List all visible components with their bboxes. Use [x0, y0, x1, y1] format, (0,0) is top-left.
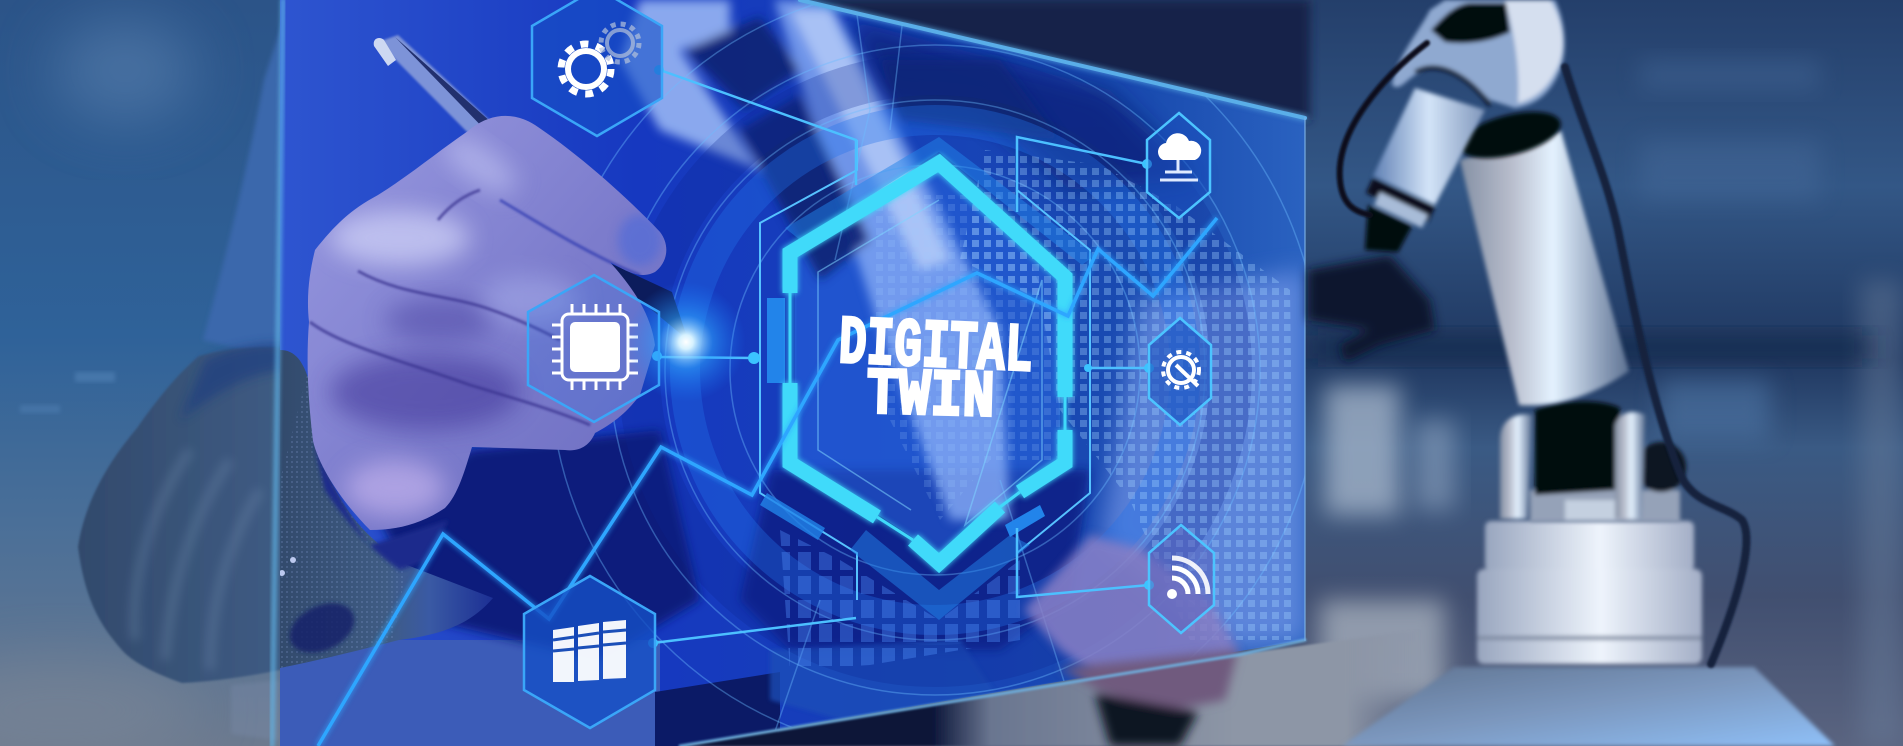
robot cables	[1340, 43, 1746, 664]
hexagon: cloud icon	[1147, 113, 1210, 218]
shirt and tie light bands	[620, 0, 1060, 520]
pen tip light spark	[626, 282, 746, 402]
hexagon interior blue wash	[795, 170, 1060, 555]
navy upper right suit	[850, 20, 1200, 190]
dark navy suit beneath hand	[380, 430, 700, 660]
lower centre lighter band	[768, 640, 980, 718]
lower centre dark suit	[740, 470, 1090, 650]
robot elbow joint	[1392, 0, 1565, 108]
pen	[374, 35, 688, 340]
data columns below hexagon	[780, 530, 1020, 670]
sleeve inside panel	[280, 350, 493, 668]
transparent holographic panel	[231, 0, 1305, 746]
robot arm	[1308, 0, 1835, 746]
title: Digital Twin	[837, 306, 1034, 436]
robot gripper shadow	[1308, 255, 1435, 362]
hand and cuff below panel	[1060, 650, 1238, 746]
connector dots	[648, 65, 1154, 648]
hexagon: wifi icon	[1149, 525, 1214, 633]
robot main arm cylinder	[1460, 131, 1629, 405]
hexagon: tools gear icon	[1149, 318, 1211, 425]
robot pedestal	[1342, 667, 1835, 746]
hexagon: chip icon	[528, 275, 659, 422]
floor below panel	[680, 630, 1420, 746]
world map dot grid	[960, 150, 1295, 640]
title: Digital Twin: DIGITAL	[837, 306, 1034, 391]
accent bars around hexagon	[760, 137, 1095, 620]
robot base rings	[1477, 521, 1702, 664]
second hand behind panel	[1024, 535, 1238, 700]
dotted cuff weave	[281, 376, 403, 668]
jacket sleeve	[78, 343, 493, 683]
connector lines	[653, 70, 1149, 643]
inner thin hexagon	[818, 200, 1042, 525]
outer thin hexagon frame	[760, 137, 1090, 600]
main cyan hexagon	[790, 163, 1065, 563]
dark torso above panel	[780, 0, 1310, 120]
sleeve buttons	[280, 557, 357, 655]
scene inside panel	[253, 0, 1320, 746]
robot black joint ring	[1455, 103, 1565, 167]
concentric hologram rings	[550, 0, 1320, 746]
dots inside hexagon	[870, 195, 1060, 520]
robot shoulder fork	[1500, 401, 1686, 522]
right side lavender glow	[1100, 270, 1305, 650]
hexagon: server racks icon	[524, 576, 655, 728]
panel edge highlights	[272, 0, 1305, 746]
hand holding pen	[308, 116, 666, 530]
robot forearm	[1365, 88, 1485, 252]
jacket back outside panel	[203, 0, 290, 360]
rising graph line	[318, 218, 1217, 746]
dark lower suit band	[655, 672, 780, 746]
cuff shadow	[313, 440, 448, 570]
title: Digital Twin: TWIN	[865, 357, 995, 436]
hexagon: gear icon	[532, 0, 662, 136]
